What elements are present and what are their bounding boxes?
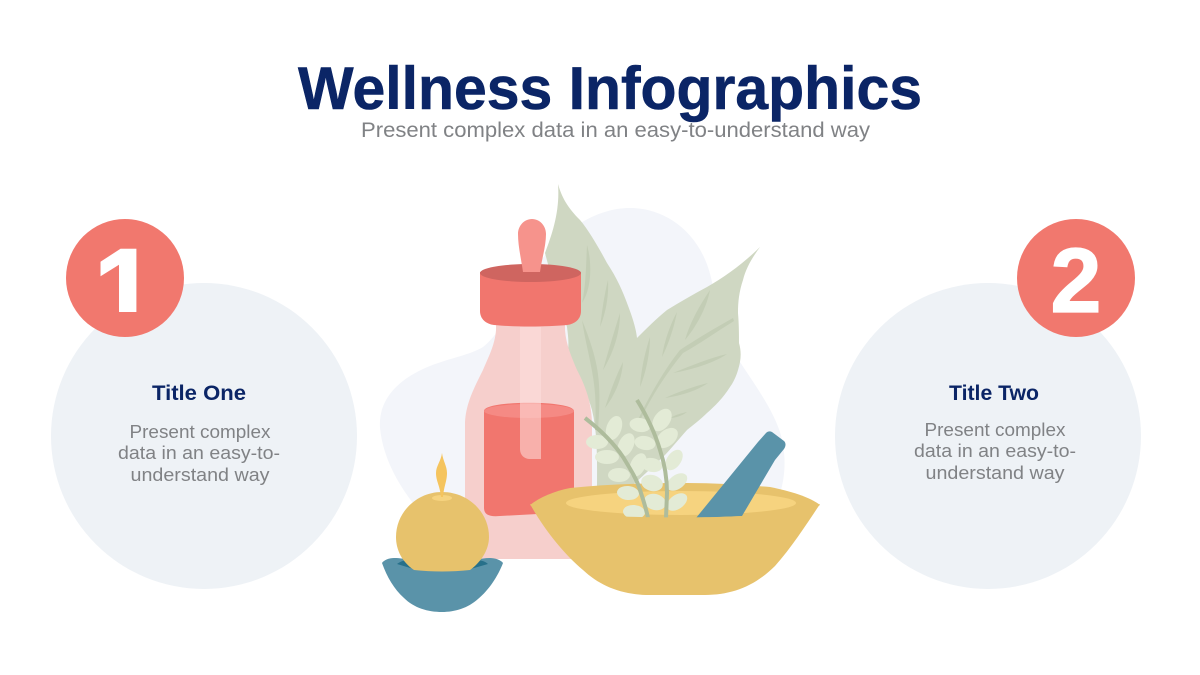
- mortar and pestle: [530, 431, 820, 595]
- body text: title two: [914, 420, 1076, 483]
- body text: title one: [118, 422, 280, 485]
- heading: title one: Title One: [152, 382, 246, 405]
- body text: title two: understand way: [926, 463, 1064, 483]
- left leaf: [545, 184, 660, 488]
- body text: title one: data in an easy-to-: [118, 443, 280, 463]
- panel: title two: [835, 219, 1141, 589]
- wax pool: [432, 495, 452, 501]
- candle: [382, 453, 503, 612]
- number badge 2: 2: [1050, 230, 1102, 332]
- number badge 1: [66, 219, 184, 337]
- candle bowl: [382, 558, 503, 612]
- panel: title one: [51, 219, 357, 589]
- bowl interior shade: [397, 560, 488, 570]
- right leaf: [600, 247, 760, 485]
- body text: title two: Present complex: [924, 420, 1066, 440]
- panel background circle: [835, 283, 1141, 589]
- heading: title two: Title Two: [949, 382, 1039, 405]
- mortar rim: [530, 483, 820, 530]
- candle sphere: [396, 492, 489, 572]
- dropper bottle: [465, 219, 592, 559]
- dropper tube: [520, 327, 541, 459]
- number badge 1: 1: [94, 226, 156, 351]
- number badge 2: [1017, 219, 1135, 337]
- mortar inner: [566, 491, 796, 515]
- liquid: [484, 403, 574, 516]
- subtitle: Present complex data in an easy-to-understand way: [361, 119, 871, 142]
- bottle cap: [480, 264, 581, 326]
- mortar body: [530, 504, 820, 595]
- body text: title one: understand way: [130, 465, 270, 485]
- central illustration: [380, 184, 820, 612]
- title: Wellness Infographics: [298, 55, 922, 122]
- background blob: [380, 208, 785, 555]
- body text: title two: data in an easy-to-: [914, 441, 1076, 461]
- liquid surface: [484, 404, 574, 418]
- dropper bulb: [518, 219, 546, 272]
- pestle: [696, 431, 786, 518]
- bottle glass: [465, 322, 592, 559]
- herb sprigs: [585, 400, 690, 520]
- body text: title one: Present complex: [130, 422, 270, 442]
- panel background circle: [51, 283, 357, 589]
- flame: [436, 453, 447, 497]
